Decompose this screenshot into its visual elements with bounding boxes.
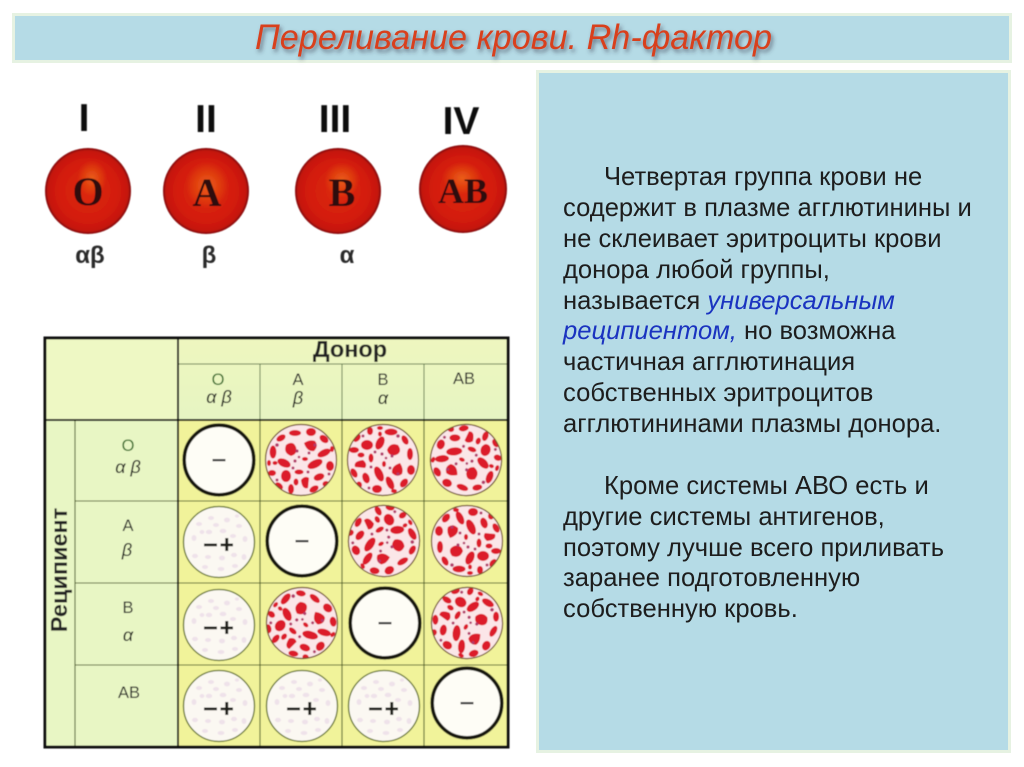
recipient row labels: А: [122, 517, 134, 535]
text block: other antigen systems: собственную кровь.: [563, 595, 798, 623]
text block: fourth blood group: агглютининами плазмы донора.: [563, 410, 941, 438]
donor column labels: [206, 370, 475, 408]
text block: other antigen systems: заранее подготовленную: [563, 564, 860, 592]
group III: α: [340, 242, 355, 269]
recipient row labels: В: [122, 599, 134, 617]
donor column labels: α: [378, 388, 389, 408]
table backgrounds: [45, 338, 509, 748]
blood groups diagram: [45, 97, 507, 269]
recipient row labels: α β: [115, 457, 141, 477]
recipient row labels: [115, 437, 141, 702]
title: Переливание крови. Rh-фактор: [255, 18, 772, 57]
recipient row labels: АВ: [118, 684, 140, 702]
recipient row labels: α: [123, 625, 134, 645]
group II: A: [193, 170, 222, 215]
text block: fourth blood group: содержит в плазме агглютинины и: [563, 194, 972, 222]
heading: recipient: Реципиент: [46, 508, 72, 632]
group I: [45, 97, 131, 269]
group III: [295, 98, 381, 269]
group II: II: [195, 98, 217, 141]
title bar: [14, 14, 1010, 62]
group I: O: [72, 169, 104, 214]
donor column labels: В: [377, 371, 389, 389]
recipient row labels: О: [122, 437, 135, 455]
compatibility table: [45, 336, 516, 748]
text block: fourth blood group: называется универсальным: [563, 287, 895, 315]
panel: explanatory text: [538, 72, 1010, 752]
text block: fourth blood group: частичная агглютинация: [563, 348, 855, 376]
donor column labels: О: [212, 371, 225, 389]
row B results: [184, 572, 516, 674]
group I: αβ: [75, 242, 105, 269]
group III: B: [329, 170, 355, 215]
group I: I: [79, 97, 89, 140]
table grid: [45, 338, 508, 747]
text block: other antigen systems: [563, 472, 944, 623]
text block: fourth blood group: [562, 163, 972, 438]
group IV: AB: [438, 171, 488, 211]
text block: fourth blood group: реципиентом, но возможна: [562, 317, 896, 345]
donor column labels: α β: [206, 387, 232, 407]
group II: β: [202, 242, 216, 269]
group III: III: [319, 98, 351, 141]
text block: other antigen systems: другие системы антигенов,: [563, 503, 885, 531]
group IV: [419, 100, 507, 233]
recipient row labels: β: [121, 540, 132, 560]
group II: [163, 98, 249, 269]
heading: donor: Донор: [313, 336, 387, 362]
text block: other antigen systems: Кроме системы АВО есть и: [604, 472, 929, 500]
row O results: [184, 414, 512, 506]
donor column labels: β: [292, 388, 303, 408]
donor column labels: А: [292, 371, 304, 389]
text block: fourth blood group: собственных эритроцитов: [563, 379, 873, 407]
text block: other antigen systems: поэтому лучше всего приливать: [563, 534, 944, 562]
row AB results: [184, 668, 502, 742]
text block: fourth blood group: донора любой группы,: [563, 256, 830, 284]
donor column labels: АВ: [453, 370, 475, 388]
group IV: IV: [443, 100, 479, 143]
row A results: [184, 492, 503, 590]
text block: fourth blood group: не склеивает эритроциты крови: [563, 225, 942, 253]
text block: fourth blood group: Четвертая группа крови не: [604, 163, 922, 191]
